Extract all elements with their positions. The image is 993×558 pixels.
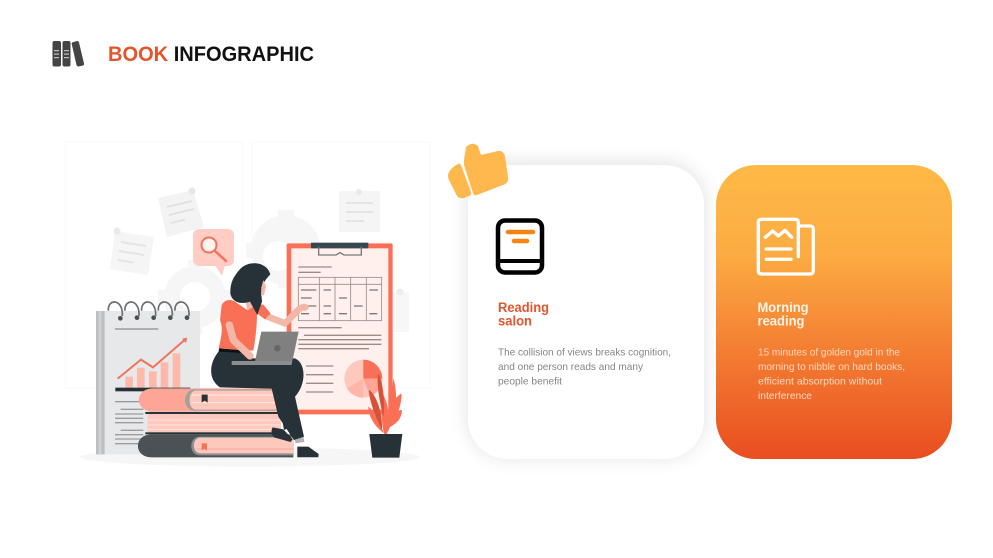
table xyxy=(298,277,382,321)
heading: salon xyxy=(498,314,532,328)
body text: efficient absorption without xyxy=(758,376,882,388)
title: BOOK INFOGRAPHIC xyxy=(108,43,314,66)
middle book xyxy=(148,412,281,433)
search bubble xyxy=(193,229,234,276)
body text: morning to nibble on hard books, xyxy=(758,361,905,373)
body text: and one person reads and many xyxy=(498,361,644,373)
near arm xyxy=(229,325,250,356)
heading: Morning xyxy=(758,300,808,315)
shirt xyxy=(219,300,271,351)
woman with laptop xyxy=(211,263,319,457)
heading: Reading xyxy=(498,300,549,315)
potted plant xyxy=(368,373,402,458)
stack of books xyxy=(138,388,293,457)
panel: morning reading card xyxy=(716,165,952,459)
icon: thumbs up badge xyxy=(448,144,508,198)
logo icon: row of books xyxy=(52,41,84,66)
heading xyxy=(498,300,549,328)
faint background panels xyxy=(65,142,430,388)
trousers xyxy=(211,351,304,440)
body text: The collision of views breaks cognition, xyxy=(498,346,671,358)
bottom book xyxy=(138,434,293,457)
hair xyxy=(230,263,270,315)
ground shadow xyxy=(80,448,420,466)
body text xyxy=(758,346,905,402)
body text: people benefit xyxy=(498,376,562,388)
heading: reading xyxy=(758,314,804,328)
arm behind xyxy=(266,308,300,323)
panel: reading salon card xyxy=(468,165,704,459)
notepad with chart xyxy=(96,302,200,454)
body text: interference xyxy=(758,390,812,402)
face xyxy=(261,280,266,296)
neck xyxy=(245,295,259,311)
pie chart xyxy=(344,360,382,398)
icon: book xyxy=(498,220,542,272)
laptop xyxy=(254,332,299,364)
belt xyxy=(219,348,249,353)
clipboard xyxy=(287,243,393,414)
background gears xyxy=(158,210,326,334)
sticky notes xyxy=(110,188,409,332)
heading xyxy=(758,300,808,328)
body text xyxy=(498,346,671,388)
top book xyxy=(139,388,278,412)
illustration: woman reading on books xyxy=(65,142,430,466)
far leg and shoes xyxy=(278,397,297,430)
icon: newspaper xyxy=(758,219,813,274)
body text: 15 minutes of golden gold in the xyxy=(758,346,900,358)
